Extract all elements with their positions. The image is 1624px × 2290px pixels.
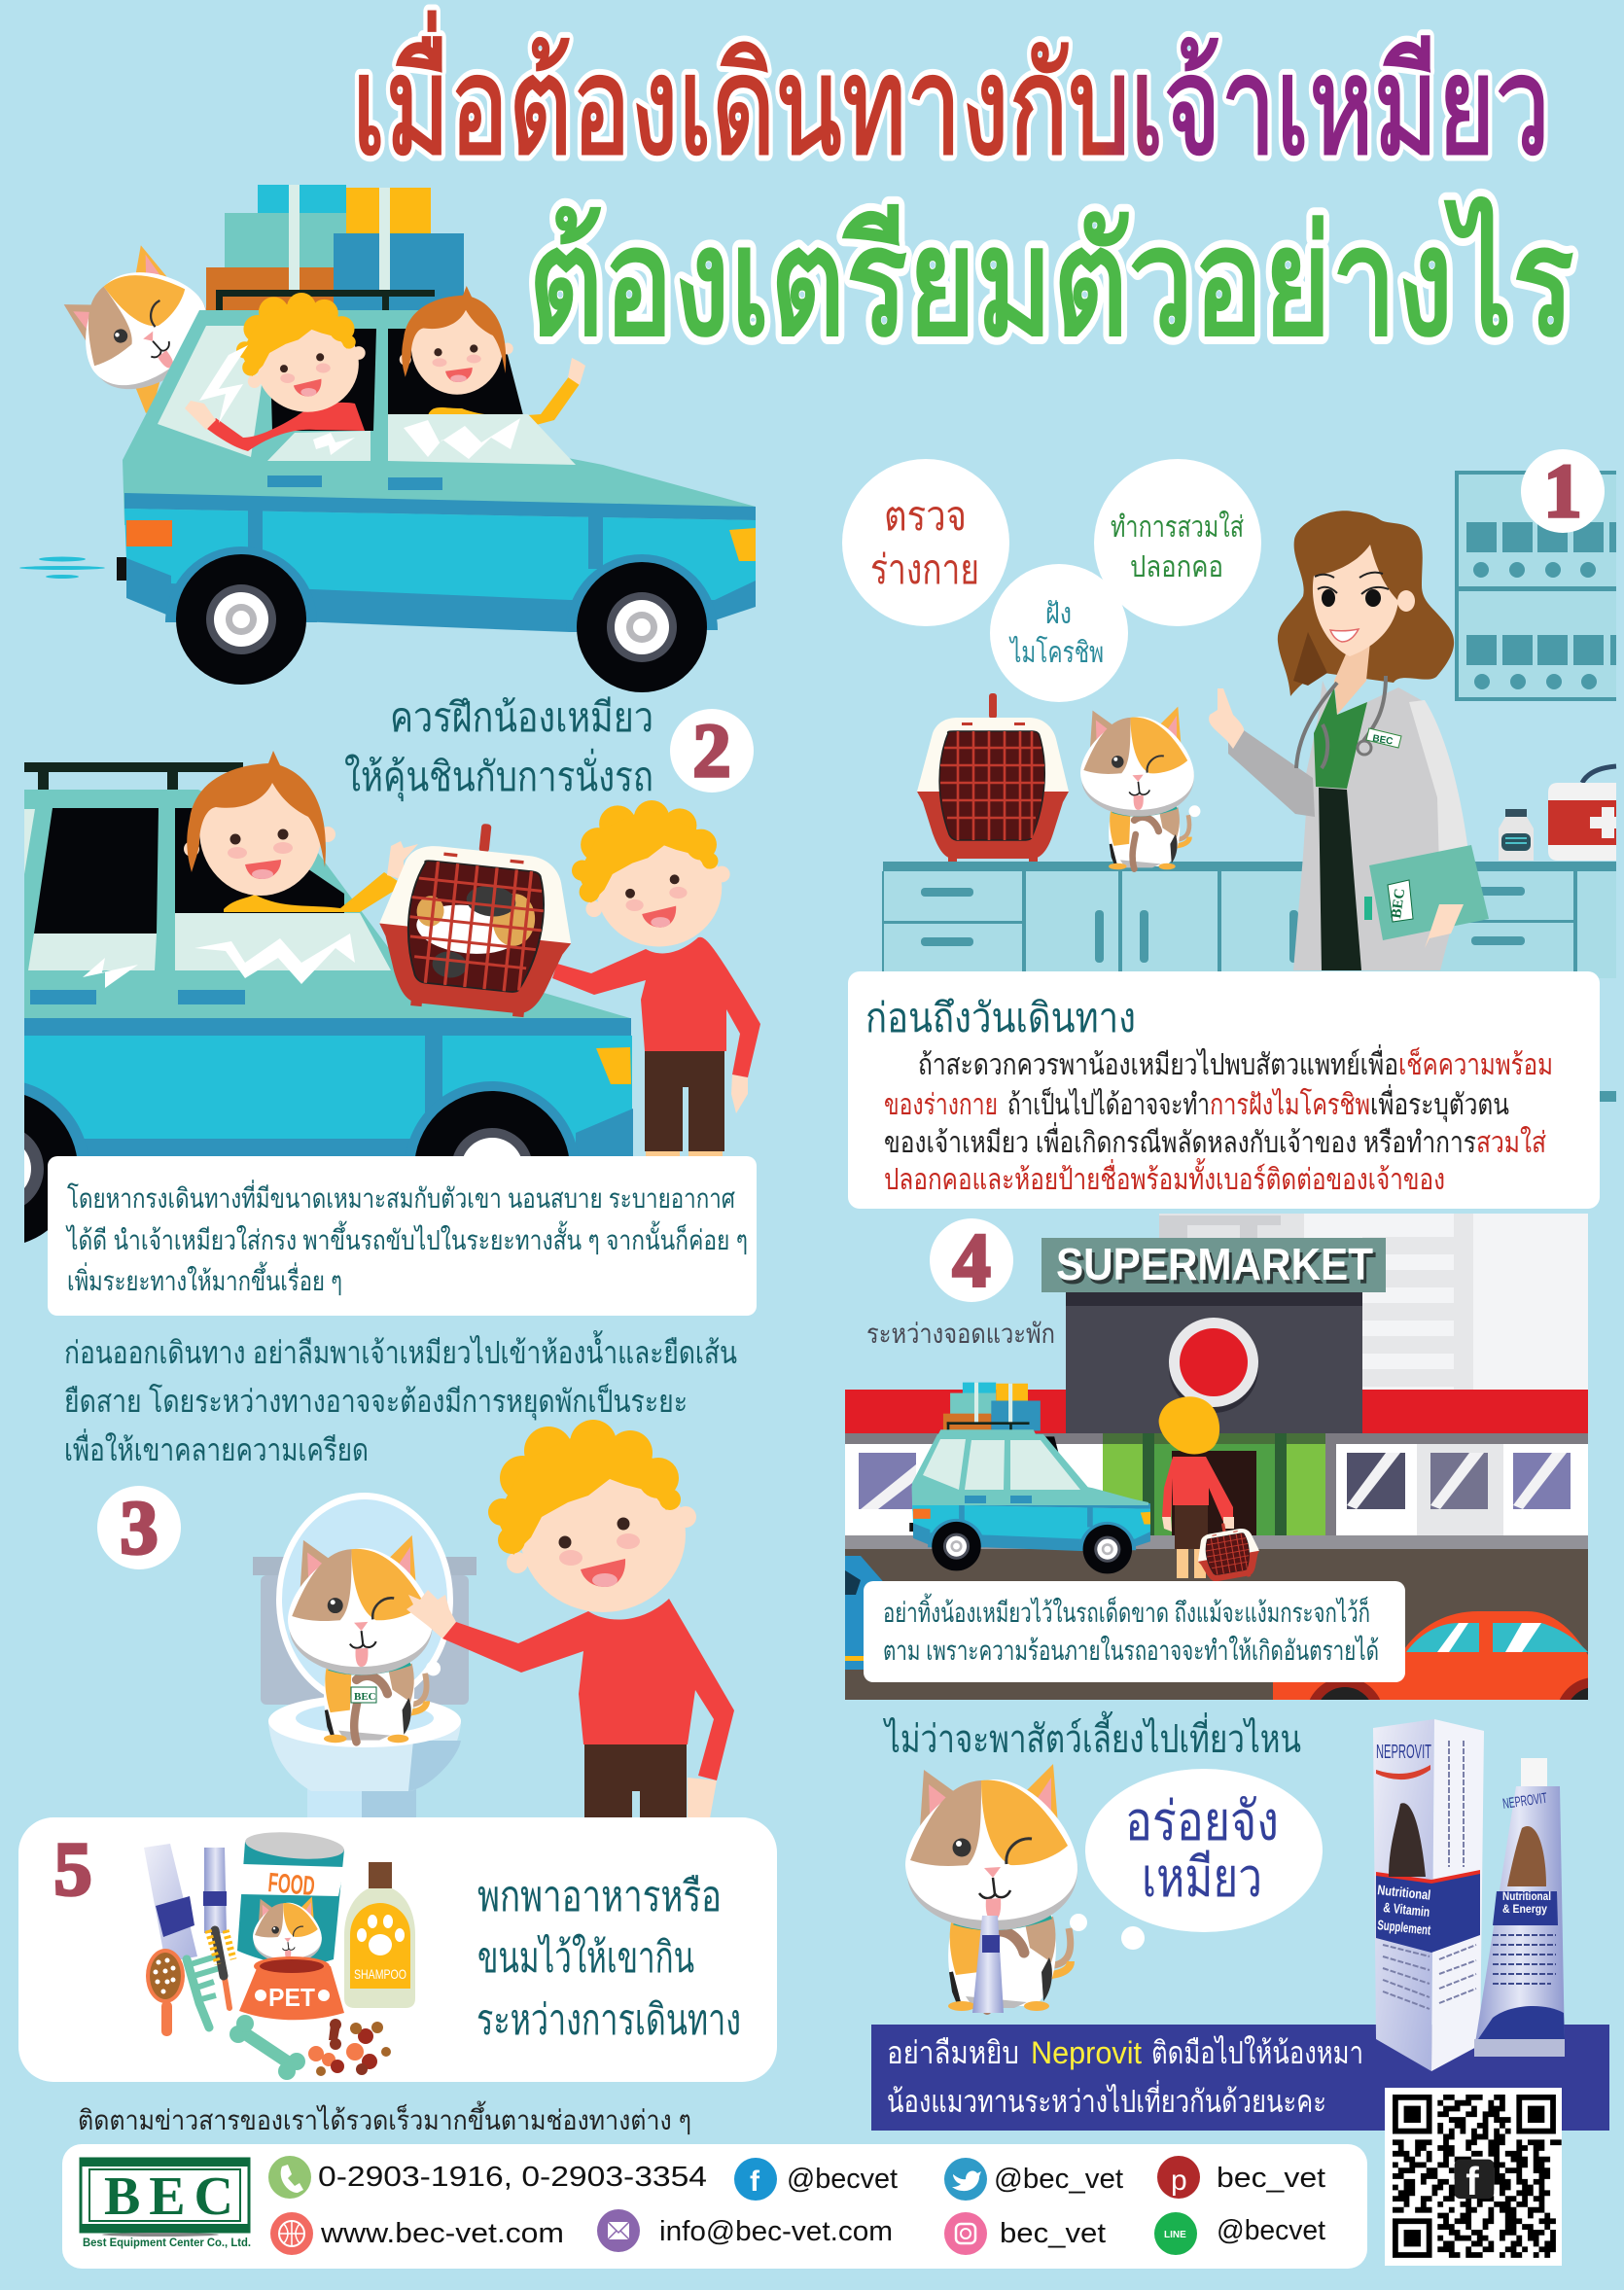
line xyxy=(1154,2212,1325,2255)
panel 5 text xyxy=(477,1873,741,2044)
pale front window xyxy=(158,326,270,457)
car xyxy=(117,185,756,692)
parked small car xyxy=(909,1383,1150,1573)
blue banner: ติดมือไปให้น้องหมา xyxy=(1151,2035,1363,2070)
line: LINE xyxy=(1164,2230,1186,2240)
supermarket sign: SUPERMARKET xyxy=(1056,1239,1373,1289)
big boy xyxy=(406,1420,734,1818)
panel 5: food and supplies xyxy=(18,1817,777,2082)
follow us line: ติดตามข่าวสารของเราได้รวดเร็วมากขึ้นตามช่องทางต่าง ๆ xyxy=(78,2100,691,2135)
product tube: Nutritional xyxy=(1502,1889,1551,1903)
pet carrier xyxy=(917,693,1069,862)
speech bubble: microchip: ฝัง xyxy=(1045,598,1072,630)
panel 3 text: ยืดสาย โดยระหว่างทางอาจจะต้องมีการหยุดพักเป็นระยะ xyxy=(64,1383,688,1421)
number 4: 4 xyxy=(953,1217,990,1302)
pinterest xyxy=(1157,2156,1325,2199)
facebook xyxy=(734,2158,898,2201)
counter cabinets xyxy=(882,862,1616,1102)
caption box: ได้ดี นำเจ้าเหมียวใส่กรง พาขึ้นรถขับไปในระยะทางสั้น ๆ จากนั้นก็ค่อย ๆ xyxy=(65,1220,748,1255)
speech bubble: microchip: ไมโครชิพ xyxy=(1008,635,1104,669)
boy in car xyxy=(185,293,366,451)
BEC logo xyxy=(81,2159,251,2249)
product box: NEPROVIT xyxy=(1376,1742,1431,1763)
product box: & Vitamin xyxy=(1383,1899,1430,1920)
heading: ให้คุ้นชินกับการนั่งรถ xyxy=(344,749,653,802)
warning box: ตาม เพราะความร้อนภายในรถอาจจะทำให้เกิดอันตรายได้ xyxy=(883,1635,1379,1666)
cat on counter xyxy=(1080,707,1200,869)
food can xyxy=(237,1829,345,1965)
panel 4: supermarket scene xyxy=(845,1214,1588,1700)
cat on toilet xyxy=(288,1535,441,1743)
warning box xyxy=(864,1581,1405,1682)
panel 5 text: ระหว่างการเดินทาง xyxy=(477,1996,741,2044)
blue car at edge xyxy=(845,1556,883,1670)
paragraph: เพื่อระบุตัวตน xyxy=(1370,1084,1509,1123)
combs and brush xyxy=(146,1930,233,2036)
BEC logo: Best Equipment Center Co., Ltd. xyxy=(83,2237,251,2249)
speech bubble: อร่อยจัง xyxy=(1125,1790,1279,1851)
speech bubble: collar: ทำการสวมใส่ xyxy=(1111,511,1244,544)
heading: ควรฝึกน้องเหมียว xyxy=(390,694,653,740)
shampoo bottle xyxy=(344,1862,415,2008)
pet bowl xyxy=(239,1956,344,2020)
doctor: BEC xyxy=(1389,888,1408,920)
instagram xyxy=(944,2212,1106,2255)
number 3: 3 xyxy=(121,1485,158,1569)
facebook: @becvet xyxy=(787,2164,898,2195)
paragraph: ของเจ้าเหมียว เพื่อเกิดกรณีพลัดหลงกับเจ้าของ หรือทำการ xyxy=(884,1122,1476,1159)
twitter xyxy=(944,2158,1123,2201)
website xyxy=(270,2212,564,2255)
speech bubble: collar: ปลอกคอ xyxy=(1130,551,1223,583)
cat on toilet: BEC xyxy=(354,1691,376,1703)
product box: Supplement xyxy=(1377,1917,1431,1938)
heading xyxy=(344,694,653,802)
heading: ไม่ว่าจะพาสัตว์เลี้ยงไปเที่ยวไหน xyxy=(883,1710,1301,1761)
speech bubble: check-up: ร่างกาย xyxy=(870,546,979,592)
number 3 xyxy=(97,1485,181,1569)
paragraph: ถ้าเป็นไปได้อาจจะทำ xyxy=(1007,1086,1210,1121)
heading: ก่อนถึงวันเดินทาง xyxy=(865,995,1136,1040)
panel 3 text: เพื่อให้เขาคลายความเครียด xyxy=(64,1428,369,1467)
BEC logo: BEC xyxy=(104,2167,233,2227)
website: www.bec-vet.com xyxy=(320,2218,564,2249)
caption box xyxy=(48,1156,757,1316)
panel 5 text: ขนมไว้ให้เขากิน xyxy=(477,1933,694,1982)
product tube: & Energy xyxy=(1502,1902,1547,1916)
girl in car xyxy=(400,286,585,428)
twitter: @bec_vet xyxy=(994,2164,1123,2195)
pinterest: bec_vet xyxy=(1217,2163,1325,2194)
product box xyxy=(1373,1719,1484,2071)
pet bowl: PET xyxy=(268,1983,315,2012)
red car xyxy=(1273,1611,1588,1700)
panel 2: car, carrier and boy xyxy=(0,694,760,1316)
boy carrying carrier, back view xyxy=(1159,1396,1263,1585)
speech bubble: collar xyxy=(1094,459,1261,626)
number 2 xyxy=(670,708,754,793)
blue banner: อย่าลืมหยิบ xyxy=(887,2035,1019,2070)
speech bubble xyxy=(1085,1769,1323,1950)
caption box: โดยหากรงเดินทางที่มีขนาดเหมาะสมกับตัวเขา นอนสบาย ระบายอากาศ xyxy=(67,1180,735,1214)
email xyxy=(597,2209,893,2252)
store front xyxy=(1066,1292,1362,1433)
QR code: f xyxy=(1465,2159,1479,2203)
lower car windows xyxy=(199,345,576,465)
tilted carrier with cat xyxy=(371,814,583,1021)
blue banner: Neprovit xyxy=(1031,2035,1142,2070)
instagram: bec_vet xyxy=(1000,2218,1106,2249)
supplement tube xyxy=(203,1848,227,1933)
number 1: 1 xyxy=(1544,448,1581,533)
panel 5 text: พกพาอาหารหรือ xyxy=(477,1873,722,1920)
phone: 0-2903-1916, 0-2903-3354 xyxy=(318,2162,707,2193)
motion lines xyxy=(19,556,105,579)
panel: before the travel day xyxy=(848,971,1600,1209)
food can: FOOD xyxy=(266,1867,316,1901)
paragraph: สวมใส่ xyxy=(1476,1126,1546,1159)
kibble xyxy=(308,2019,391,2076)
number 1 xyxy=(1521,448,1605,533)
line: @becvet xyxy=(1217,2215,1325,2246)
speech bubble: check-up xyxy=(842,459,1009,626)
contact panel xyxy=(62,2144,1367,2269)
number 4 xyxy=(930,1217,1013,1302)
hero car with kids and cat xyxy=(19,185,756,692)
number 5: 5 xyxy=(54,1826,91,1911)
paragraph: ถ้าสะดวกควรพาน้องเหมียวไปพบสัตวแพทย์เพื่อ xyxy=(918,1044,1398,1081)
panel 1: vet visit scene xyxy=(842,448,1616,1102)
panel 3 text xyxy=(64,1330,737,1467)
close-up car xyxy=(0,762,633,1247)
supplement box xyxy=(144,1844,197,1962)
boy holding carrier xyxy=(552,800,760,1157)
panel 3 text: ก่อนออกเดินทาง อย่าลืมพาเจ้าเหมียวไปเข้าห้องน้ำและยืดเส้น xyxy=(64,1330,737,1370)
neprovit section xyxy=(871,1710,1609,2131)
speech bubble: microchip xyxy=(990,564,1128,702)
paragraph: การฝังไมโครชิพ xyxy=(1210,1087,1370,1121)
blue banner: น้องแมวทานระหว่างไปเที่ยวกันด้วยนะคะ xyxy=(887,2080,1326,2119)
speech bubble: เหมียว xyxy=(1142,1847,1262,1908)
rest-stop label: ระหว่างจอดแวะพัก xyxy=(866,1319,1055,1349)
number 2: 2 xyxy=(692,708,731,793)
warning box: อย่าทิ้งน้องเหมียวไว้ในรถเด็ดขาด ถึงแม้จะแง้มกระจกไว้ก็ xyxy=(883,1593,1370,1628)
bone toy xyxy=(229,2015,305,2080)
toilet xyxy=(253,1493,477,1819)
title xyxy=(352,12,1574,368)
shelves xyxy=(1457,473,1616,699)
paragraph: เช็คความพร้อม xyxy=(1398,1046,1553,1081)
toilet with cat and boy xyxy=(253,1420,734,1819)
QR code xyxy=(1385,2088,1562,2266)
paragraph xyxy=(884,1044,1553,1196)
paragraph: ปลอกคอและห้อยป้ายชื่อพร้อมทั้งเบอร์ติดต่อของเจ้าของ xyxy=(884,1158,1445,1196)
doctor: BEC xyxy=(1371,733,1394,748)
supermarket sign: SUPERMARKET xyxy=(1059,1243,1376,1293)
pinterest: p xyxy=(1171,2165,1187,2197)
email: info@bec-vet.com xyxy=(659,2216,893,2247)
medicine bottle xyxy=(1499,809,1534,861)
street illustration xyxy=(845,1214,1588,1700)
cat peeking from car xyxy=(50,234,228,413)
product tube: NEPROVIT xyxy=(1501,1790,1548,1813)
speech bubble: check-up: ตรวจ xyxy=(884,493,967,539)
blue banner xyxy=(871,2025,1609,2131)
first aid kit xyxy=(1548,766,1616,861)
happy cat with tube xyxy=(905,1764,1087,2013)
girl in close-up car xyxy=(184,751,418,912)
product tube xyxy=(1474,1758,1565,2057)
product box: Nutritional xyxy=(1377,1882,1431,1903)
facebook: f xyxy=(750,2166,760,2198)
caption box: เพิ่มระยะทางให้มากขึ้นเรื่อย ๆ xyxy=(67,1261,342,1296)
shampoo bottle: SHAMPOO xyxy=(354,1966,406,1982)
doctor xyxy=(1209,511,1489,970)
paragraph: ของร่างกาย xyxy=(884,1089,998,1121)
phone xyxy=(268,2156,707,2199)
